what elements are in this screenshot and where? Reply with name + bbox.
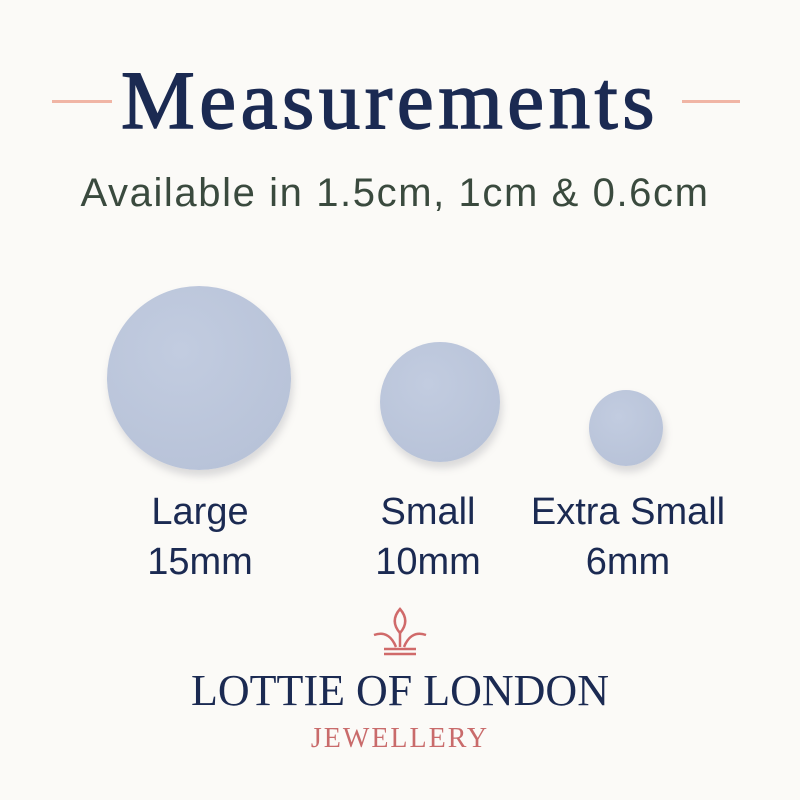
label: extra small: 6mm — [586, 541, 670, 583]
label: large: Large — [151, 491, 249, 533]
decorative line right — [682, 100, 740, 103]
label: large — [147, 491, 253, 583]
logo — [191, 607, 609, 754]
label: small: Small — [380, 491, 476, 533]
brand subline: JEWELLERY — [311, 723, 489, 754]
label: small: 10mm — [375, 541, 481, 583]
decorative line left — [52, 100, 112, 103]
circle: large — [107, 286, 291, 470]
label: small — [375, 491, 481, 583]
subtitle: Available in 1.5cm, 1cm & 0.6cm — [80, 171, 710, 215]
title — [52, 54, 740, 146]
icon: crown — [374, 607, 426, 656]
heading text: Measurements — [121, 54, 659, 146]
label: extra small — [531, 491, 725, 583]
circle: extra small — [589, 390, 663, 466]
label: extra small: Extra Small — [531, 491, 725, 533]
circle: small — [380, 342, 500, 462]
label: large: 15mm — [147, 541, 253, 583]
brand name: LOTTIE OF LONDON — [191, 666, 609, 715]
